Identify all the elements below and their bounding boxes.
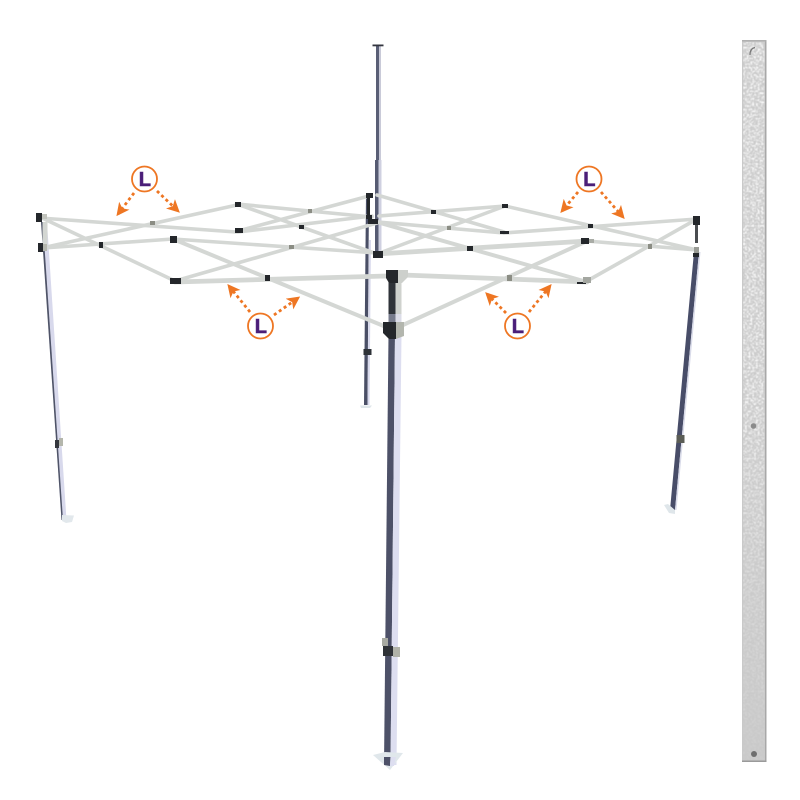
front-left scissor struts <box>40 217 387 327</box>
label L with arrows: top right <box>562 166 623 217</box>
truss frame <box>40 195 697 327</box>
truss joints <box>36 193 700 284</box>
center pole <box>372 44 384 256</box>
height adjuster <box>382 638 400 657</box>
back-left scissor struts <box>40 196 377 254</box>
foot plate <box>373 752 403 770</box>
front-right scissor struts <box>377 219 697 325</box>
label L with arrows: bottom right <box>487 286 550 338</box>
label L with arrows: top left: L <box>139 169 151 191</box>
top rivet <box>750 48 755 55</box>
right leg <box>664 252 700 514</box>
label L with arrows: bottom right: L <box>512 316 524 338</box>
bottom rivet <box>751 751 757 757</box>
label L with arrows: bottom left: L <box>255 316 267 338</box>
back center leg <box>360 195 372 408</box>
label L with arrows: top right: L <box>583 169 595 191</box>
back-right scissor struts <box>377 195 697 254</box>
top corner bracket <box>386 270 408 283</box>
label L with arrows: top left <box>118 166 178 214</box>
front corner leg <box>373 270 408 770</box>
center rivet <box>751 423 756 429</box>
truss bar detail <box>742 40 766 762</box>
label L with arrows: bottom left <box>229 286 298 338</box>
sliding bracket <box>383 322 404 339</box>
left leg <box>41 222 74 523</box>
